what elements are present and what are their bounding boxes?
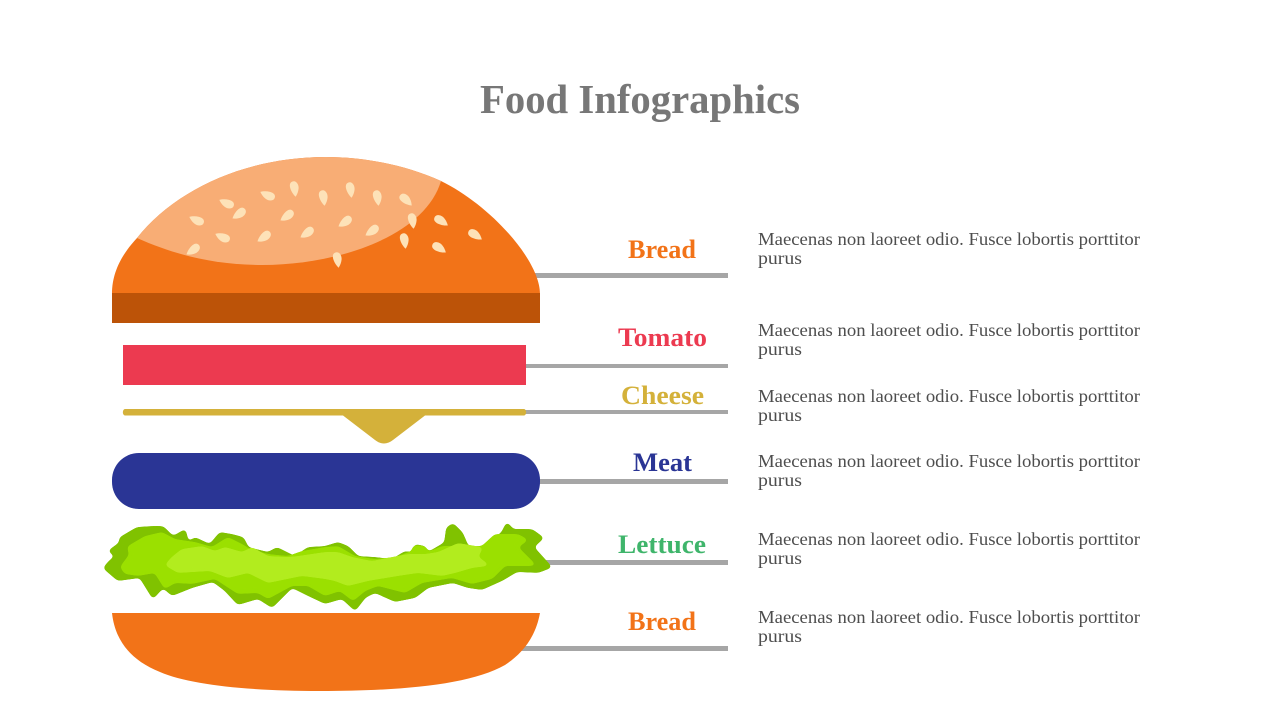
- description: Tomato: [758, 320, 1140, 359]
- description: Meat: [758, 451, 1140, 490]
- description: Bread: [758, 229, 1140, 268]
- description: Cheese: Maecenas non laoreet odio. Fusce lobortis porttitor: [758, 386, 1140, 406]
- cheese slice: [123, 409, 526, 444]
- title: Food Infographics: [480, 76, 800, 122]
- top bun: [112, 157, 540, 323]
- label: Bread bottom: Bread: [628, 607, 697, 636]
- description: Meat: purus: [758, 470, 802, 490]
- burger illustration: [104, 157, 728, 691]
- connector lines: [515, 273, 728, 651]
- label: Cheese: Cheese: [621, 381, 704, 410]
- lettuce: [104, 523, 551, 610]
- description: Cheese: [758, 386, 1140, 425]
- meat patty: [112, 453, 540, 509]
- description: Cheese: purus: [758, 405, 802, 425]
- description: Bread bottom: purus: [758, 626, 802, 646]
- description: Bread bottom: Maecenas non laoreet odio. Fusce lobortis porttitor: [758, 607, 1140, 627]
- label: Meat: Meat: [633, 448, 692, 477]
- description: Meat: Maecenas non laoreet odio. Fusce lobortis porttitor: [758, 451, 1140, 471]
- sesame seeds: [186, 180, 484, 268]
- description: Tomato: Maecenas non laoreet odio. Fusce lobortis porttitor: [758, 320, 1140, 340]
- label: Lettuce: Lettuce: [618, 530, 706, 559]
- description: Bread bottom: [758, 607, 1140, 646]
- description: Lettuce: purus: [758, 548, 802, 568]
- description: Lettuce: Maecenas non laoreet odio. Fusce lobortis porttitor: [758, 529, 1140, 549]
- description: Tomato: purus: [758, 339, 802, 359]
- description: Bread: Maecenas non laoreet odio. Fusce lobortis porttitor: [758, 229, 1140, 249]
- description: Lettuce: [758, 529, 1140, 568]
- label: Tomato: Tomato: [618, 323, 707, 352]
- tomato slice: [123, 345, 526, 385]
- description: Bread: purus: [758, 248, 802, 268]
- label: Bread: Bread: [628, 235, 697, 264]
- bottom bun: [112, 613, 540, 691]
